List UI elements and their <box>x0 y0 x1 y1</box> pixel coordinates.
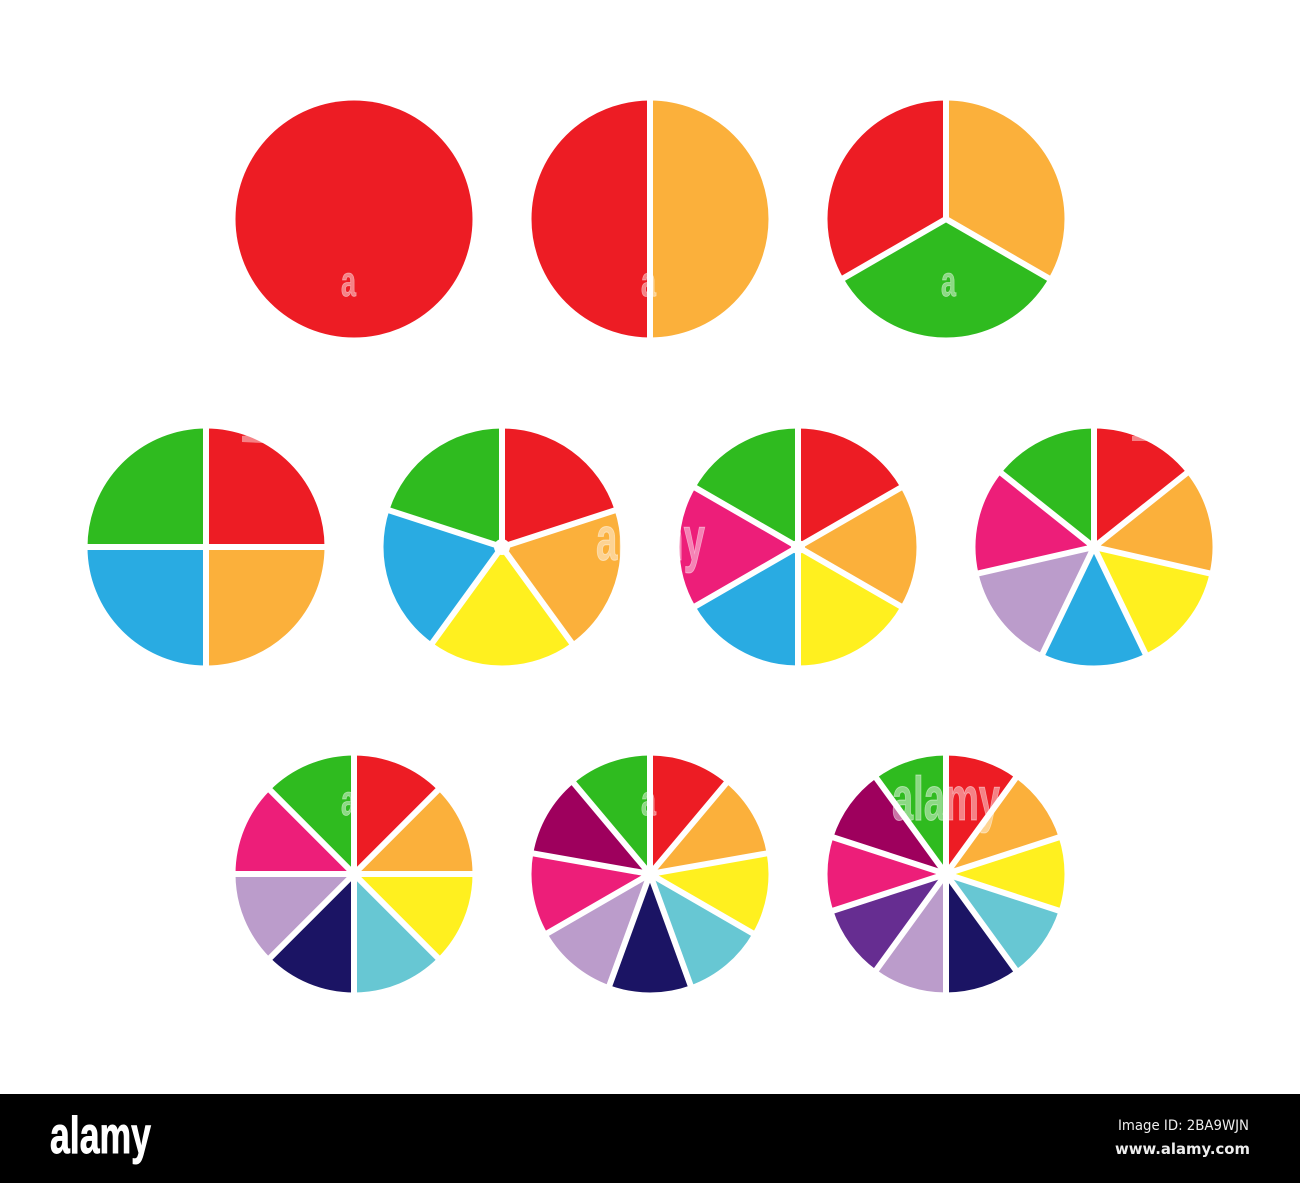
watermark: alamy: a <box>941 258 957 306</box>
pie: 9 segments <box>527 749 773 991</box>
watermark: alamy: alamy <box>892 765 1000 834</box>
watermark: alamy: a <box>641 258 657 306</box>
pie: 5 segments <box>383 422 621 648</box>
pie: 10 segments <box>827 749 1065 999</box>
watermark: alamy: a <box>641 777 657 825</box>
image id: Image ID: 2BA9WJN <box>1118 1118 1249 1134</box>
logo: alamy: alamy <box>50 1107 151 1165</box>
watermark: alamy: alamy <box>596 505 705 574</box>
footer bar <box>0 1094 1300 1183</box>
pie: 4 segments <box>81 422 331 672</box>
watermark: alamy <box>242 258 1148 834</box>
pie: 6 segments <box>690 422 906 672</box>
pie: 2 segments <box>591 94 709 344</box>
watermark: alamy: a <box>341 777 357 825</box>
pie: 1 segment <box>236 100 472 338</box>
watermark: alamy: a <box>341 258 357 306</box>
pie: 3 segments <box>838 94 1054 300</box>
pie: 7 segments <box>972 422 1216 660</box>
website: www.alamy.com <box>1115 1140 1250 1158</box>
pie: 8 segments <box>229 749 479 999</box>
